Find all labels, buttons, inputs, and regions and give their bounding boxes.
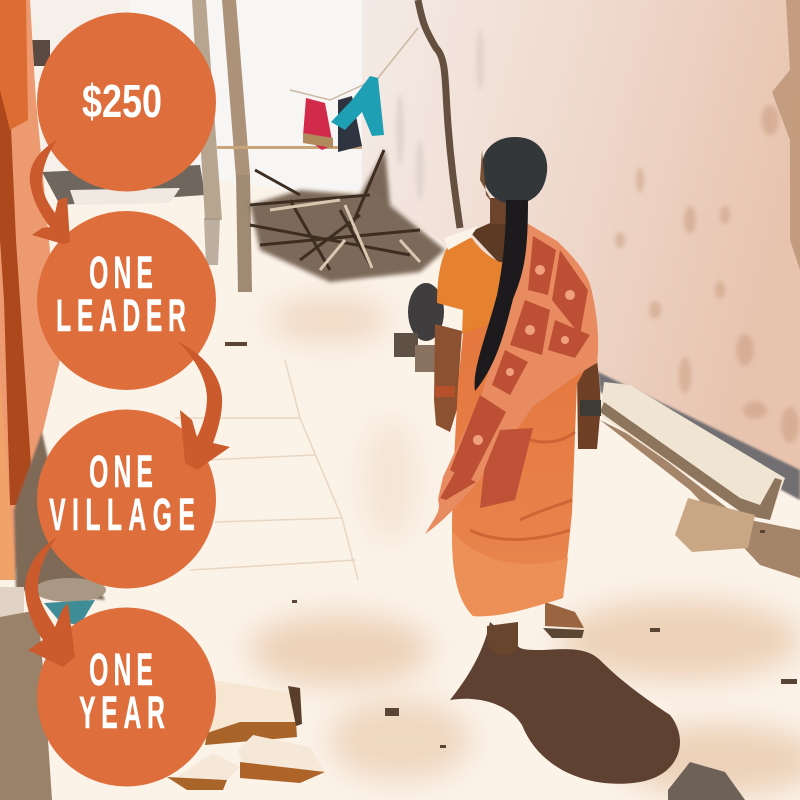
wooden poles <box>192 0 222 220</box>
braid <box>475 200 528 391</box>
bare back <box>470 215 512 262</box>
ground specks <box>225 342 797 748</box>
left pink wall <box>0 0 60 580</box>
circle: one village: ONE <box>89 446 153 497</box>
woman shadow <box>450 622 680 784</box>
circle: one village: VILLAGE <box>49 489 195 540</box>
blouse highlight <box>444 226 478 250</box>
arrow: one village to one year <box>25 537 75 667</box>
circle: one village <box>37 410 216 588</box>
block stone <box>675 498 755 552</box>
arrow: $250 to one leader <box>30 140 70 244</box>
wall stains <box>615 105 799 443</box>
arrow: one leader to one village <box>178 342 230 470</box>
broken stones <box>205 680 297 733</box>
horizontal line on wall <box>217 146 362 149</box>
bangles <box>435 386 455 397</box>
shawl <box>425 222 598 534</box>
clothes line <box>290 28 418 100</box>
cracks <box>288 686 302 726</box>
wall base shadow <box>598 372 800 500</box>
top-left building <box>30 0 130 180</box>
circle: one leader <box>37 211 216 390</box>
bottom right rock <box>668 762 745 800</box>
neck <box>490 198 512 224</box>
woman <box>425 137 601 655</box>
dark cloth <box>338 96 362 152</box>
log shadow <box>600 420 800 578</box>
soil <box>0 610 52 800</box>
small stone <box>0 587 24 617</box>
ground <box>0 180 800 800</box>
paving slab edges <box>175 360 358 580</box>
red cloth <box>303 98 333 150</box>
ground warm patches <box>250 298 800 795</box>
blue flip-flops <box>44 600 95 625</box>
left rust strip <box>0 60 32 505</box>
back white wall <box>130 0 365 192</box>
log <box>600 382 785 520</box>
head <box>482 137 547 204</box>
circle: one year <box>37 608 216 786</box>
right wall edge <box>772 0 800 270</box>
blouse <box>437 238 504 334</box>
blue cloth <box>331 76 384 136</box>
shawl motifs <box>473 265 575 445</box>
left arm <box>434 324 462 432</box>
right arm <box>577 360 600 449</box>
lower shawl pattern <box>480 428 533 508</box>
rubble under left wall <box>14 432 105 600</box>
feet and sandals <box>487 622 518 655</box>
circle: $250 <box>37 12 216 192</box>
right wall <box>362 0 800 500</box>
circle: one year: YEAR <box>79 687 165 738</box>
branch post <box>418 0 460 228</box>
circle: $250: $250 <box>82 75 162 127</box>
dress <box>452 260 590 616</box>
pot and stones <box>408 283 444 341</box>
circle: one leader: ONE <box>89 247 153 298</box>
brush pile <box>250 150 445 282</box>
face edge <box>480 150 494 205</box>
circle: one year: ONE <box>89 644 153 695</box>
shawl pattern <box>440 236 590 500</box>
dress folds <box>470 432 575 539</box>
circle: one leader: LEADER <box>56 290 186 341</box>
